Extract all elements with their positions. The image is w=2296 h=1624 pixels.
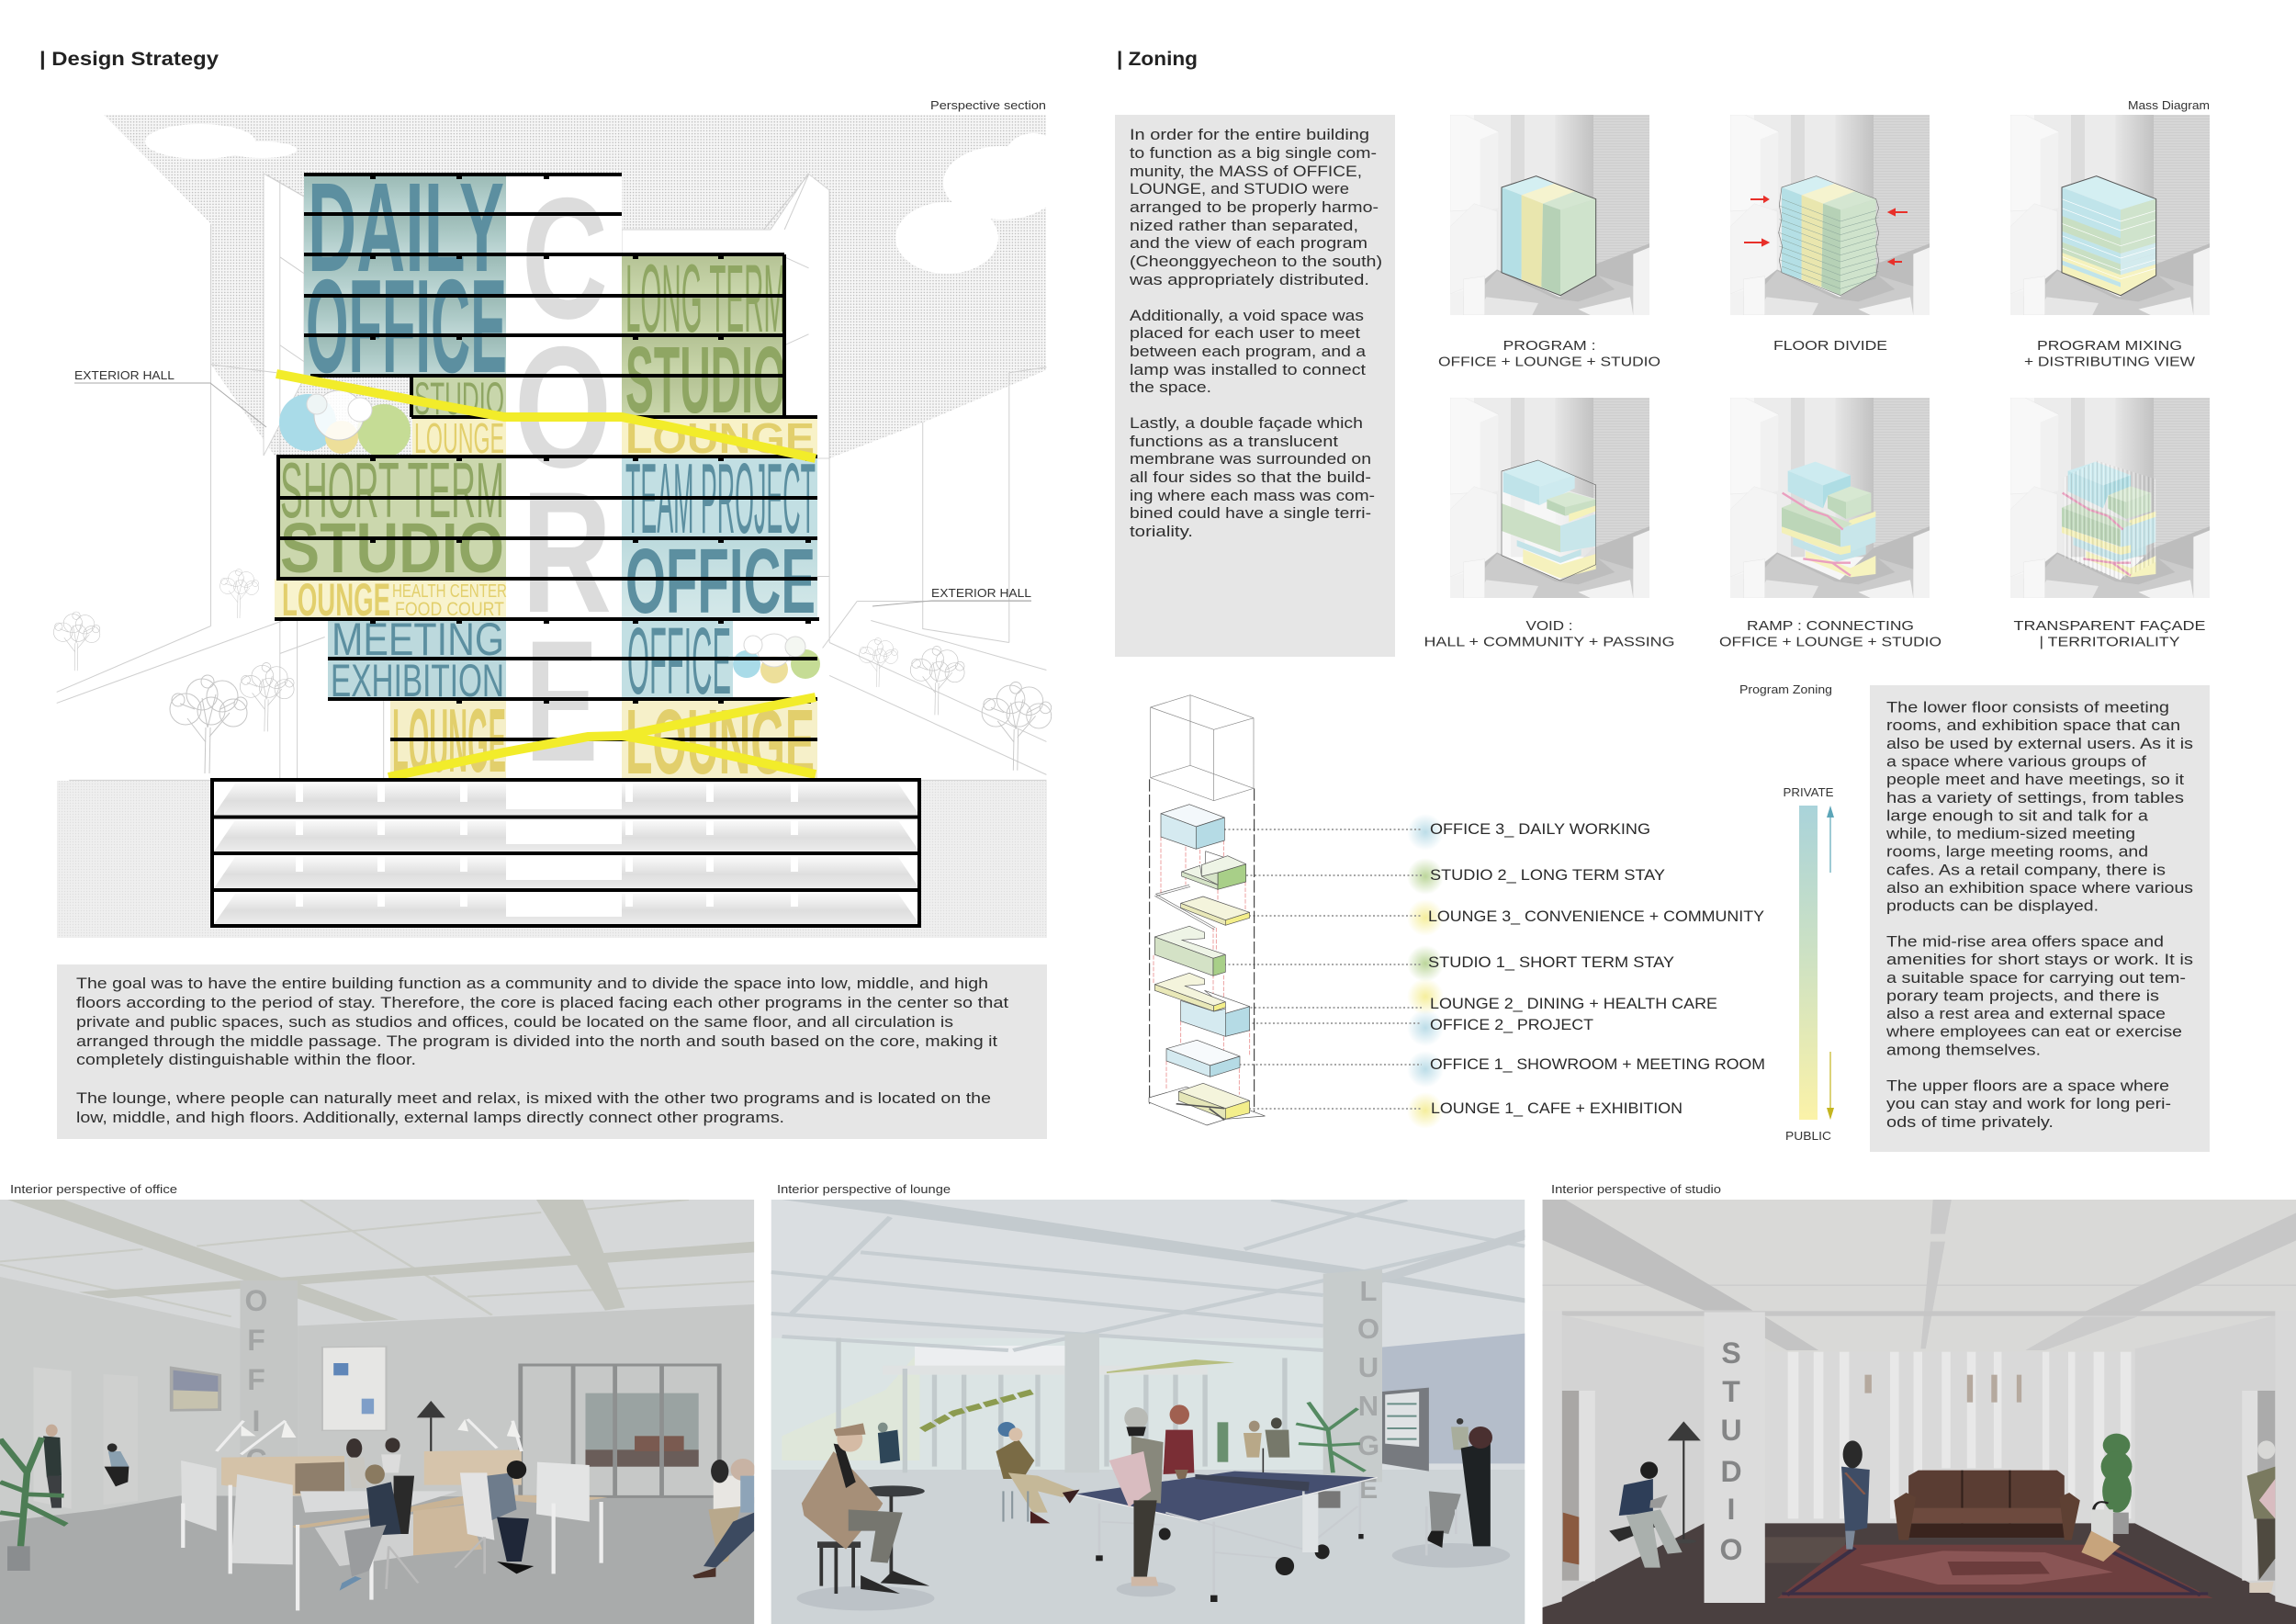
panel: perspective section drawing: LOUNGE [392,690,506,791]
surrounding context linework [57,175,1046,780]
arrow: up to private [1827,806,1834,873]
caption: transparent facade [2013,618,2206,650]
label: mass diagram: Mass Diagram [2128,98,2210,112]
lounge column letters: N [1358,1390,1379,1422]
diagram: ramp [1730,398,1930,598]
diagram: floor divide [1730,115,1930,315]
text block: zoning intro: (Cheonggyecheon to the south) [1130,253,1382,270]
diagram: void [1450,398,1649,598]
panel: interior perspective of lounge [771,1200,1525,1624]
lounge column letters: U [1358,1351,1379,1383]
studio column letters: I [1728,1493,1735,1526]
text block: design strategy [57,964,1047,1139]
text block: design strategy: arranged through the middle passage. The program is divided into the north and south based on the core, making it [76,1032,997,1050]
text block: design strategy: floors according to the period of stay. Therefore, the core is placed facing each other programs in the center so that [76,994,1008,1011]
heading: zoning: | Zoning [1117,49,1198,70]
text block: program zoning: a space where various groups of [1886,753,2146,770]
text block: program zoning: also a rest area and external space [1886,1005,2166,1022]
text block: zoning intro: and the view of each program [1130,234,1367,252]
core letters: E [525,604,598,797]
text block: zoning intro: Lastly, a double façade which [1130,414,1363,432]
text block: zoning intro: Additionally, a void space was [1130,307,1364,324]
label: exterior hall right [872,586,1031,606]
clouds [145,124,1061,274]
chart: private to public gradient scale: PUBLIC [1785,1129,1831,1143]
caption: transparent facade: | TERRITORIALITY [2039,634,2180,650]
caption: ramp: OFFICE + LOUNGE + STUDIO [1719,634,1941,650]
text block: program zoning [1870,685,2210,1152]
text block: zoning intro: all four sides so that the build- [1130,468,1371,486]
red arrows [1744,197,1908,265]
studio column letters: S [1721,1336,1741,1370]
isometric volumes [1149,695,1265,1125]
panel: perspective section drawing: TEAM PROJECT [625,443,816,555]
panel: perspective section drawing: LOUNGE [625,414,815,462]
text block: zoning intro: toriality. [1130,523,1193,540]
lounge column letters [1357,1275,1379,1505]
text block: program zoning: rooms, large meeting rooms, and [1886,843,2148,861]
diagram: exploded program axonometric [1149,695,1444,1129]
text block: design strategy: low, middle, and high floors. Additionally, external lamps directly connect other programs. [76,1109,784,1126]
labels: program floors: OFFICE 1_ SHOWROOM + MEETING ROOM [1430,1055,1765,1073]
office furniture and people [0,1401,755,1610]
office column letters: I [253,1404,260,1438]
office column letters: F [247,1363,265,1396]
caption: program mixing: + DISTRIBUTING VIEW [2024,355,2196,369]
text block: program zoning: you can stay and work for long peri- [1886,1095,2171,1112]
lounge column letters: L [1360,1275,1377,1307]
sky with dot pattern [104,115,1046,458]
labels: program floors: STUDIO 1_ SHORT TERM STAY [1428,953,1674,971]
panel: perspective section drawing: HEALTH CENTER [392,581,507,602]
text block: program zoning: has a variety of settings, from tables [1886,789,2184,806]
text block: zoning intro: bined could have a single terri- [1130,504,1371,522]
core letters: O [514,310,612,503]
text block: program zoning: a suitable space for carrying out tem- [1886,969,2186,987]
caption: ramp [1719,618,1941,650]
panel: perspective section drawing: STUDIO [280,509,504,588]
text block: program zoning: amenities for short stays or work. It is [1886,951,2193,968]
text block: program zoning: cafes. As a retail company, there is [1886,861,2166,878]
tower facade side walls [264,174,829,458]
labels: program floors: OFFICE 3_ DAILY WORKING [1430,820,1650,838]
lounge column letters: G [1357,1429,1379,1461]
core letters: R [522,456,612,648]
text block: program zoning: where employees can eat or exercise [1885,1023,2182,1041]
panel: perspective section drawing: LOUNGE [414,414,504,462]
office column letters: C [245,1443,267,1476]
labels: program floors: STUDIO 2_ LONG TERM STAY [1430,866,1665,884]
panel: interior perspective of studio [1543,1200,2296,1624]
panel: perspective section drawing: LONG TERM [625,245,786,353]
chart: private to public gradient scale [1784,785,1834,1143]
text block: design strategy: completely distinguishable within the floor. [76,1051,416,1068]
terrace planting circles [279,390,820,683]
caption: program mixing: PROGRAM MIXING [2037,338,2182,354]
text block: program zoning: people meet and have meetings, so it [1886,771,2184,788]
core letters: C [522,162,608,355]
text block: zoning intro: In order for the entire building [1130,126,1369,143]
text block: program zoning: ods of time privately. [1886,1113,2054,1131]
panel: interior perspective of office [0,1200,755,1624]
dotted leader lines [1221,829,1422,1109]
text block: zoning intro: functions as a translucent [1130,433,1338,450]
program labels in section: OFFICE [625,530,816,633]
text block: zoning intro: between each program, and a [1130,343,1367,360]
office column letters: F [247,1324,265,1357]
panel: perspective section drawing: LOUNGE [282,574,390,626]
text block: zoning intro: membrane was surrounded on [1130,450,1371,468]
caption: lounge interior: Interior perspective of lounge [777,1182,951,1196]
program labels in section: DAILY [308,157,504,299]
panel: perspective section drawing [53,115,1061,938]
text block: zoning intro: lamp was installed to connect [1130,361,1366,378]
studio column letters: O [1720,1533,1742,1566]
caption: program: PROGRAM : [1503,338,1596,354]
studio column letters: T [1722,1375,1740,1408]
labels: program floors: LOUNGE 1_ CAFE + EXHIBITION [1431,1100,1683,1117]
labels: program floors: LOUNGE 2_ DINING + HEALTH CARE [1430,995,1717,1012]
text block: design strategy: private and public spaces, such as studios and offices, could be located on the same floor, and all circulation is [76,1013,953,1031]
text block: zoning intro: LOUNGE, and STUDIO were [1130,180,1349,197]
floor slabs and structure [275,175,819,739]
labels: program floors [1428,820,1765,1117]
caption: studio interior: Interior perspective of studio [1551,1182,1721,1196]
office column letters: O [245,1284,267,1317]
yellow exterior ramps [276,374,816,777]
text block: program zoning: large enough to sit and talk for a [1886,806,2149,824]
text block: program zoning: also be used by external users. As it is [1886,735,2193,752]
text block: design strategy: The goal was to have the entire building function as a community and to divide the space into low, middle, and high [76,975,988,992]
text block: zoning intro: to function as a big single com- [1130,144,1377,162]
caption: floor divide: FLOOR DIVIDE [1773,338,1887,354]
text block: zoning intro: arranged to be properly harmo- [1130,198,1379,216]
text block: zoning intro: nized rather than separated, [1130,217,1358,234]
arrow: down to public [1827,1052,1834,1120]
label: exterior hall right: EXTERIOR HALL [931,586,1031,600]
diagram: program [1450,115,1649,315]
caption: void: HALL + COMMUNITY + PASSING [1424,634,1675,650]
core letters [514,162,612,797]
caption: transparent facade: TRANSPARENT FAÇADE [2013,618,2206,634]
colour glows [1407,814,1444,1129]
caption: program [1438,338,1660,369]
studio furniture and people [1609,1421,2275,1593]
label: program zoning: Program Zoning [1739,682,1832,696]
label: perspective section: Perspective section [930,98,1046,112]
panel: perspective section drawing: STUDIO [625,327,786,433]
panel: perspective section drawing: STUDIO [414,373,504,424]
panel: perspective section drawing: SHORT TERM [280,447,504,535]
label: exterior hall left [74,368,266,427]
caption: void: VOID : [1526,618,1572,634]
text block: zoning intro: ing where each mass was com- [1130,487,1375,504]
heading: design strategy: | Design Strategy [39,49,219,70]
labels: program floors: LOUNGE 3_ CONVENIENCE + COMMUNITY [1428,908,1764,925]
core white shaft [506,175,622,923]
column ticks [373,175,808,704]
caption: program: OFFICE + LOUNGE + STUDIO [1438,355,1660,369]
lounge column letters: O [1357,1313,1379,1345]
office column letters [245,1284,267,1476]
program labels in section: OFFICE [627,608,731,714]
program labels in section [306,157,816,714]
diagram: program mixing [2010,115,2210,315]
caption: office interior: Interior perspective of office [10,1182,177,1196]
text block: program zoning: also an exhibition space where various [1886,879,2193,897]
street trees [53,570,1052,773]
studio column letters [1720,1336,1742,1566]
text block: zoning intro: the space. [1130,378,1211,396]
text block: program zoning: products can be displayed. [1886,897,2099,915]
program labels in section: EXHIBITION [331,655,504,706]
caption: void [1424,618,1675,650]
basement levels [212,780,919,926]
text block: zoning intro: was appropriately distributed. [1129,271,1369,288]
panel: perspective section drawing: FOOD COURT [395,599,504,620]
panel: perspective section drawing: LOUNGE [625,691,815,794]
studio column letters: U [1720,1414,1742,1447]
text block: zoning intro [1115,115,1395,657]
text block: zoning intro: munity, the MASS of OFFICE, [1130,163,1362,180]
text block: program zoning: among themselves. [1886,1041,2041,1058]
label: exterior hall left: EXTERIOR HALL [74,368,174,382]
text block: program zoning: porary team projects, and there is [1886,987,2159,1004]
studio column letters: D [1720,1455,1742,1488]
program mass colour blocks [275,175,817,780]
text block: program zoning: The lower floor consists of meeting [1886,699,2169,716]
ground [57,781,1047,938]
text block: zoning intro: placed for each user to meet [1130,324,1360,342]
labels: program floors: OFFICE 2_ PROJECT [1430,1016,1593,1033]
lounge column letters: E [1359,1472,1378,1505]
caption: program mixing [2024,338,2196,369]
diagram: transparent facade [2010,398,2210,598]
text block: design strategy: The lounge, where people can naturally meet and relax, is mixed with the other two programs and is located on the [76,1089,991,1107]
text block: program zoning: rooms, and exhibition space that can [1886,716,2180,734]
text block: program zoning: The upper floors are a space where [1886,1077,2169,1095]
program labels in section: MEETING [332,614,504,665]
caption: ramp: RAMP : CONNECTING [1747,618,1914,634]
program labels in section: OFFICE [306,252,507,400]
chart: private to public gradient scale: PRIVATE [1784,785,1834,799]
lounge furniture and people [796,1403,1510,1610]
text block: program zoning: The mid-rise area offers space and [1886,933,2164,950]
text block: program zoning: while, to medium-sized meeting [1885,825,2135,842]
